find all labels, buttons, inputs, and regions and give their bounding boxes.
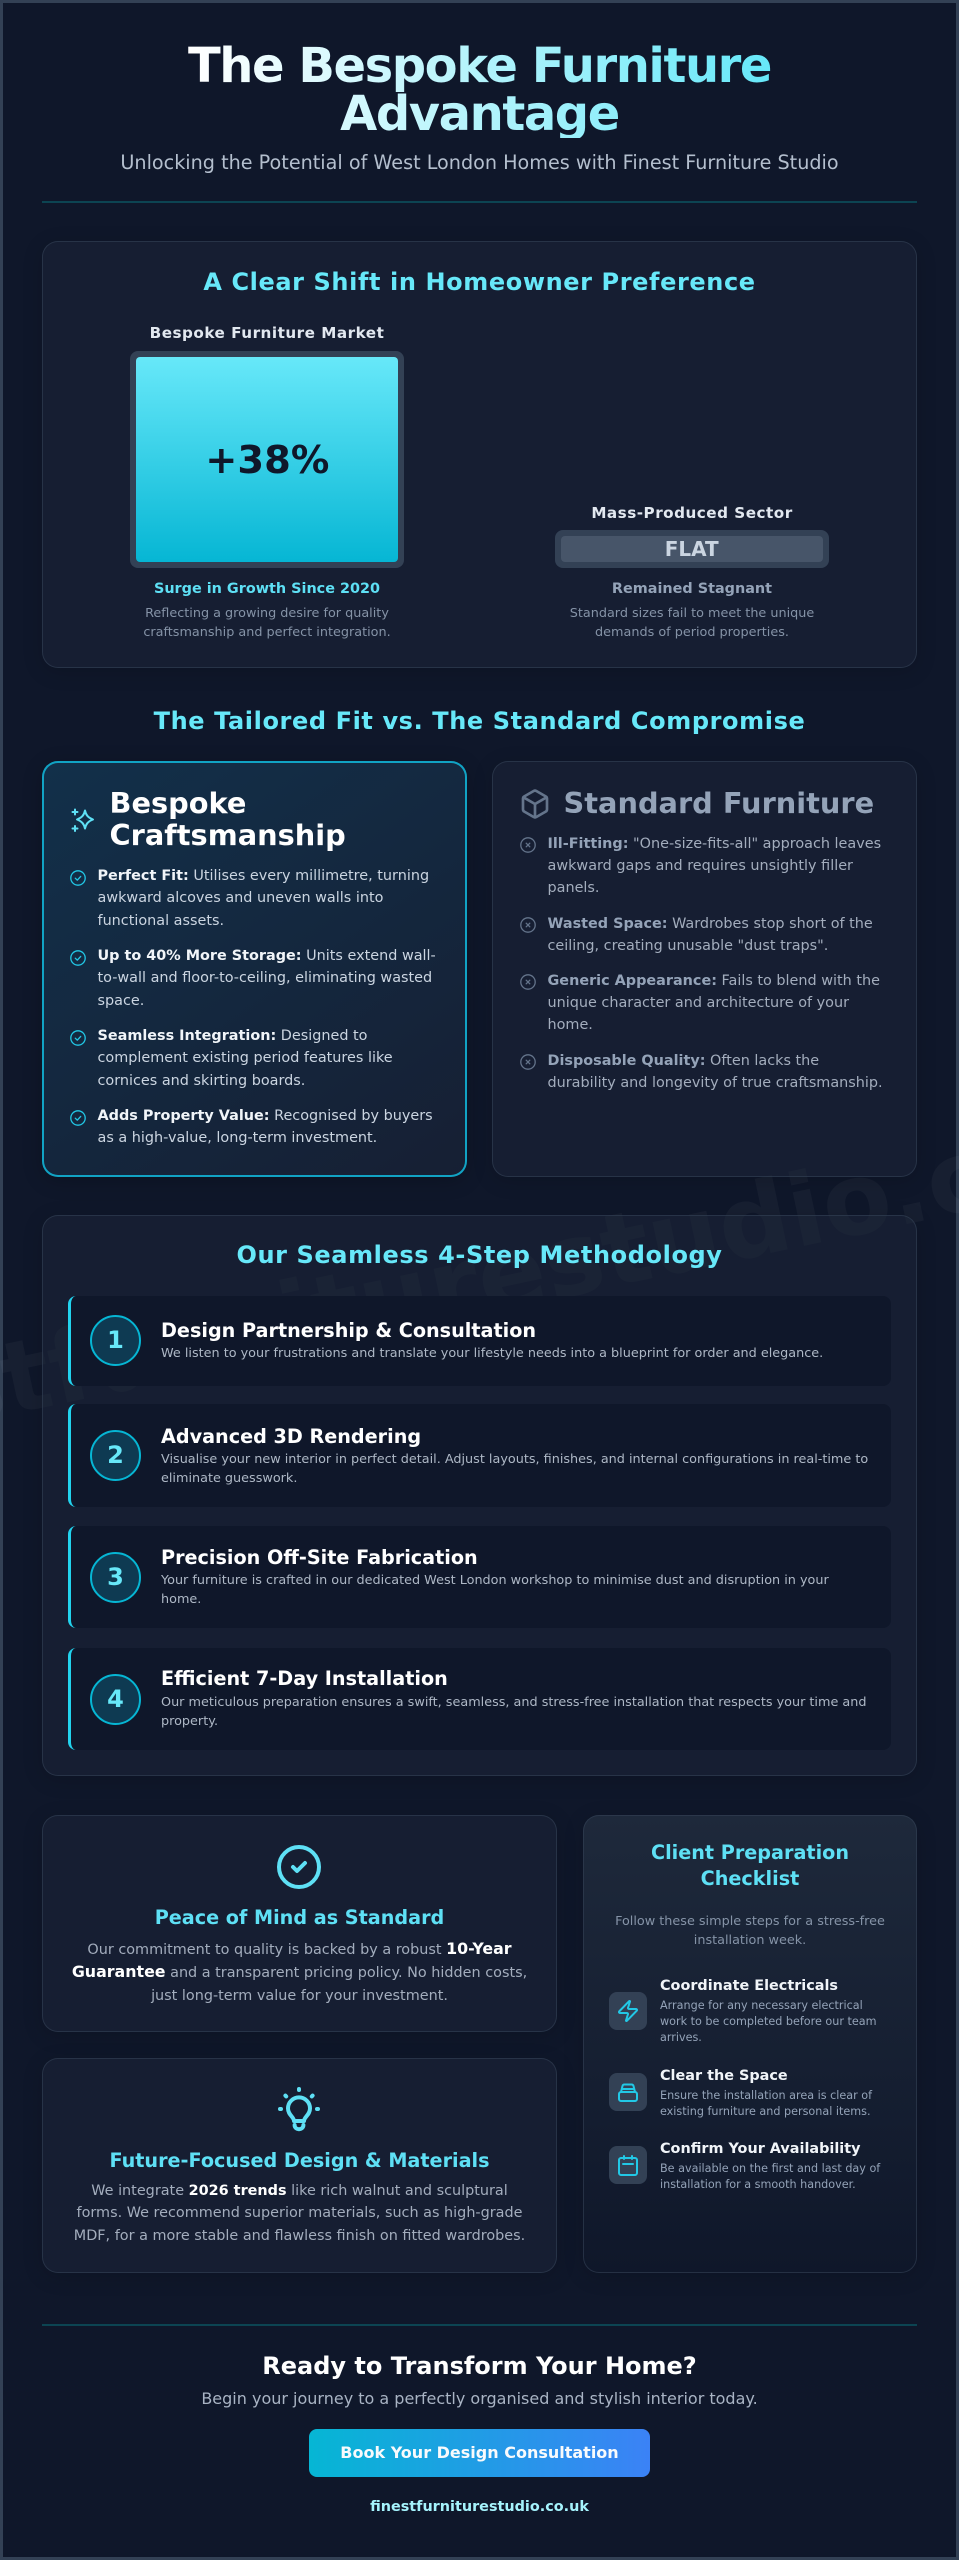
heading: preference shift: A Clear Shift in Homeowner Preference <box>203 268 756 296</box>
step 4 <box>68 1648 891 1750</box>
step number: 3 <box>107 1562 124 1590</box>
text: trends: forms. We recommend superior materials, such as high-grade <box>77 2205 522 2221</box>
text: guarantee <box>72 1939 527 2004</box>
item description: work to be completed before our team <box>660 2015 877 2028</box>
description: mass-produced: Standard sizes fail to meet the unique <box>570 606 814 620</box>
list item: perfect fit: Perfect Fit: Utilises every millimetre, turning <box>98 868 429 884</box>
step description: Our meticulous preparation ensures a swift, seamless, and stress-free installation that respects your time and <box>161 1694 866 1710</box>
text: trends: MDF, for a more stable and flawless finish on fitted wardrobes. <box>74 2228 525 2244</box>
step title: Design Partnership & Consultation <box>161 1319 536 1342</box>
title: Advantage <box>340 86 619 142</box>
text: guarantee: just long-term value for your investment. <box>151 1988 448 2004</box>
heading: bespoke: Craftsmanship <box>110 818 346 852</box>
icon: sparkles <box>72 808 94 832</box>
heading: bespoke <box>110 786 346 852</box>
item description: arrives. <box>660 2031 702 2044</box>
title <box>0 42 959 138</box>
list item: disposable quality: Disposable Quality: Often lacks the <box>548 1052 819 1068</box>
bar fill: +38% <box>136 357 398 562</box>
text: guarantee: Our commitment to quality is backed by a robust 10-Year <box>87 1939 512 1958</box>
icon: cross <box>520 917 536 933</box>
list item: storage: Up to 40% More Storage: Units extend wall- <box>98 948 436 964</box>
step description <box>161 1572 829 1607</box>
list item: storage: to-wall and floor-to-ceiling, eliminating wasted <box>98 970 432 986</box>
item title: Clear the Space <box>660 2068 788 2084</box>
step title: Efficient 7-Day Installation <box>161 1667 448 1690</box>
list item: perfect fit: awkward alcoves and uneven walls into <box>98 890 383 906</box>
list item: integration <box>98 1028 393 1089</box>
step number <box>90 1552 141 1602</box>
list item: perfect fit: functional assets. <box>98 913 224 929</box>
step title: Advanced 3D Rendering <box>161 1425 421 1448</box>
heading: bespoke: Bespoke <box>110 786 246 820</box>
icon: check <box>70 870 86 886</box>
list item: generic appearance <box>548 972 880 1033</box>
list item: property value <box>98 1108 433 1146</box>
step 3 <box>68 1526 891 1628</box>
list item: generic appearance: home. <box>548 1017 593 1033</box>
item description: Arrange for any necessary electrical <box>660 1999 863 2012</box>
description: bespoke <box>143 606 391 640</box>
call to action heading: Ready to Transform Your Home? <box>262 2352 697 2380</box>
bar: bespoke growth <box>130 351 404 568</box>
icon: lightbulb <box>278 2087 320 2132</box>
heading: methodology: Our Seamless 4-Step Methodology <box>236 1241 723 1269</box>
step description: home. <box>161 1592 201 1607</box>
list item: wasted space <box>548 916 873 954</box>
list item: ill-fitting: panels. <box>548 880 600 896</box>
list item: generic appearance: Generic Appearance: Fails to blend with the <box>548 972 880 988</box>
step description: Your furniture is crafted in our dedicated West London workshop to minimise dust and disruption in your <box>161 1572 829 1588</box>
item description: installation for a smooth handover. <box>660 2178 856 2191</box>
list item: storage <box>98 948 436 1009</box>
item description: existing furniture and personal items. <box>660 2105 871 2118</box>
subtitle: Unlocking the Potential of West London Homes with Finest Furniture Studio <box>120 151 839 174</box>
list item: wasted space: Wasted Space: Wardrobes stop short of the <box>548 916 873 932</box>
step 2 <box>68 1404 891 1507</box>
text: trends <box>74 2183 525 2244</box>
description: mass-produced <box>570 606 814 640</box>
step number: 1 <box>107 1326 124 1354</box>
label: mass-produced: Mass-Produced Sector <box>591 504 793 522</box>
step title: Precision Off-Site Fabrication <box>161 1546 478 1569</box>
list item: integration: cornices and skirting boards. <box>98 1073 305 1089</box>
website link: finestfurniturestudio.co.uk <box>370 2499 589 2515</box>
title: The Bespoke Furniture <box>188 38 771 94</box>
step description: eliminate guesswork. <box>161 1471 297 1486</box>
item description <box>660 2089 872 2118</box>
icon: box <box>522 789 548 819</box>
item description <box>660 1999 877 2044</box>
list item: property value: as a high-value, long-term investment. <box>98 1130 377 1146</box>
list item: integration: complement existing period features like <box>98 1050 393 1066</box>
step number: 4 <box>107 1684 124 1712</box>
list item: property value: Adds Property Value: Recognised by buyers <box>98 1108 433 1124</box>
intro text: installation week. <box>694 1933 806 1948</box>
description: mass-produced: demands of period properties. <box>595 625 789 640</box>
icon: check <box>70 1110 86 1126</box>
icon: cross <box>520 1054 536 1070</box>
caption: stagnant: Remained Stagnant <box>612 581 772 597</box>
text: trends: We integrate 2026 trends like rich walnut and sculptural <box>91 2183 508 2199</box>
icon: electricals <box>609 1992 647 2030</box>
icon: cross <box>520 837 536 853</box>
call to action text: Begin your journey to a perfectly organised and stylish interior today. <box>201 2389 758 2408</box>
heading: future-focused: Future-Focused Design & Materials <box>109 2149 490 2172</box>
step number <box>90 1315 141 1366</box>
list item: ill-fitting: awkward gaps and requires unsightly filler <box>548 858 853 874</box>
heading: standard: Standard Furniture <box>564 786 874 820</box>
item description: Be available on the first and last day of <box>660 2162 880 2175</box>
button: Book Your Design Consultation <box>340 2443 619 2462</box>
step description: property. <box>161 1714 218 1729</box>
step description <box>161 1694 866 1729</box>
list item: disposable quality: durability and longevity of true craftsmanship. <box>548 1075 883 1091</box>
icon: calendar <box>609 2146 647 2184</box>
step number <box>90 1674 141 1724</box>
item description <box>660 2162 880 2191</box>
panel: future-focused <box>42 2058 557 2273</box>
list item: perfect fit <box>98 868 429 929</box>
intro text: Follow these simple steps for a stress-free <box>615 1914 885 1928</box>
intro text <box>615 1914 885 1948</box>
step description: Visualise your new interior in perfect detail. Adjust layouts, finishes, and internal configurations in real-time to <box>161 1452 868 1466</box>
step number <box>90 1430 141 1481</box>
panel: homeowner preference <box>42 241 917 668</box>
icon: cross <box>520 974 536 990</box>
list item: storage: space. <box>98 993 144 1009</box>
description: bespoke: craftsmanship and perfect integration. <box>143 625 391 640</box>
icon: check <box>70 950 86 966</box>
heading: comparison: The Tailored Fit vs. The Standard Compromise <box>154 707 805 735</box>
panel: bespoke craftsmanship <box>42 761 467 1177</box>
step description <box>161 1452 868 1486</box>
panel: methodology <box>42 1215 917 1776</box>
list item: generic appearance: unique character and architecture of your <box>548 995 849 1011</box>
list item: disposable quality <box>548 1052 883 1091</box>
heading: checklist: Checklist <box>701 1867 799 1890</box>
bar fill: flat: FLAT <box>665 537 719 561</box>
item title: Coordinate Electricals <box>660 1978 838 1994</box>
heading: peace of mind: Peace of Mind as Standard <box>155 1906 444 1929</box>
panel: client preparation checklist <box>583 1815 917 2273</box>
panel: peace of mind <box>42 1815 557 2032</box>
icon: clear space <box>609 2073 647 2111</box>
step number: 2 <box>107 1441 124 1469</box>
heading: checklist <box>651 1841 849 1890</box>
button <box>309 2429 650 2477</box>
list item: ill-fitting <box>548 836 881 896</box>
text: guarantee: Guarantee and a transparent pricing policy. No hidden costs, <box>72 1962 527 1981</box>
item title: Confirm Your Availability <box>660 2141 860 2157</box>
step 1 <box>68 1296 891 1386</box>
description: bespoke: Reflecting a growing desire for quality <box>145 606 389 620</box>
caption: surge: Surge in Growth Since 2020 <box>154 581 380 597</box>
panel: standard furniture <box>492 761 917 1177</box>
heading: checklist: Client Preparation <box>651 1841 849 1864</box>
icon: check <box>70 1030 86 1046</box>
icon: check circle <box>277 1845 321 1889</box>
list item: integration: Seamless Integration: Designed to <box>98 1028 368 1044</box>
item description: Ensure the installation area is clear of <box>660 2089 872 2102</box>
step description: We listen to your frustrations and translate your lifestyle needs into a blueprint for order and elegance. <box>161 1346 823 1360</box>
label: bespoke market: Bespoke Furniture Market <box>150 324 384 342</box>
bar: mass-produced flat <box>555 530 829 568</box>
list item: ill-fitting: Ill-Fitting: "One-size-fits-all" approach leaves <box>548 836 881 852</box>
bar fill: flat <box>561 536 823 562</box>
bar fill: +38%: +38% <box>205 438 329 483</box>
list item: wasted space: ceiling, creating unusable "dust traps". <box>548 938 828 954</box>
